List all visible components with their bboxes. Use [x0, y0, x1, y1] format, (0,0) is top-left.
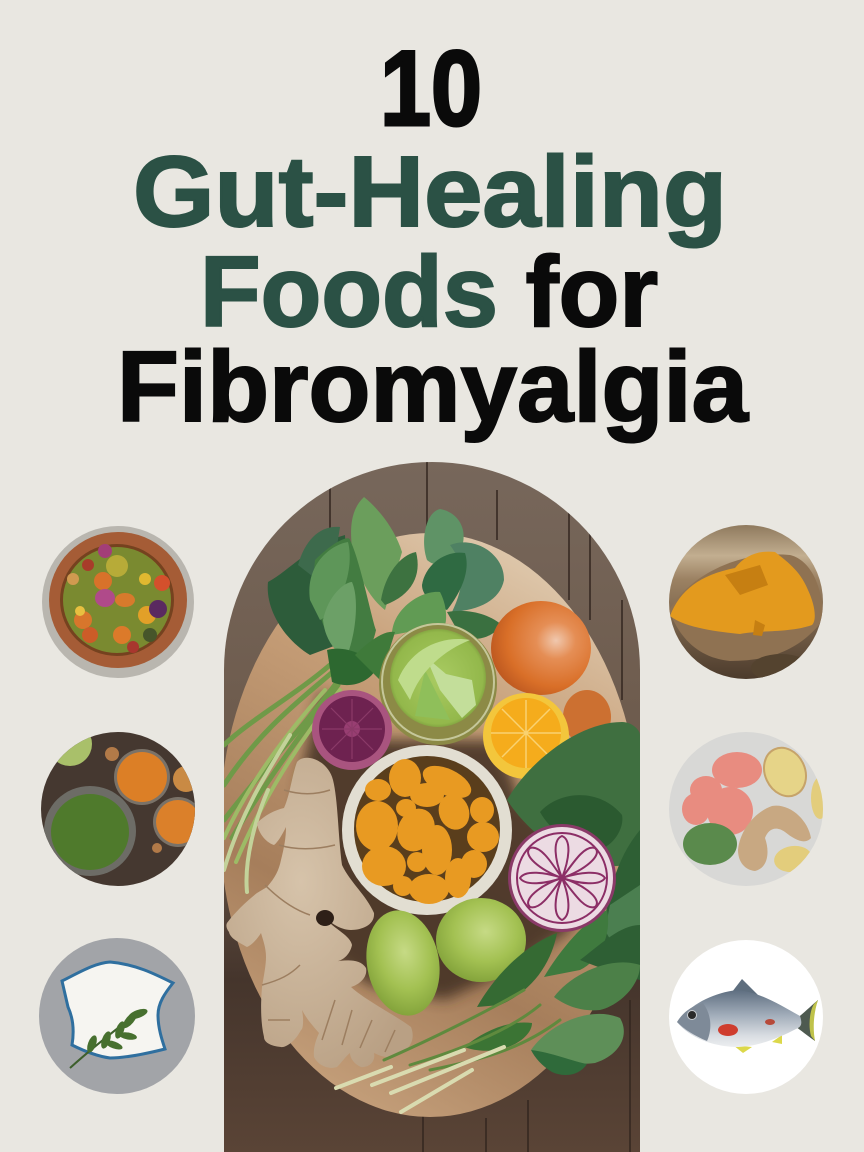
citrus slice — [483, 693, 569, 779]
turmeric heap — [670, 552, 815, 634]
bowl of turmeric chunks — [342, 745, 512, 915]
title line: 10: 10 — [380, 28, 482, 148]
pale backdrop — [669, 732, 823, 886]
small beet slice — [312, 690, 392, 770]
fermented greens jar — [379, 623, 497, 745]
terracotta bowl — [49, 532, 187, 668]
title — [117, 28, 749, 443]
orange bowl right — [153, 797, 195, 847]
fish tail — [795, 1000, 818, 1041]
fish fins — [732, 979, 758, 995]
dark table — [41, 732, 195, 886]
salmon pieces — [682, 752, 762, 835]
central arch photo: food platter — [220, 462, 640, 1152]
food circle: yogurt dish — [39, 938, 195, 1094]
ginger root — [226, 758, 413, 1068]
ginger slices — [756, 741, 814, 803]
title line: Fibromyalgia: Fibromyalgia — [117, 331, 749, 443]
spinach leaves right — [507, 722, 640, 941]
fish eye — [688, 1010, 696, 1020]
title line: Foods for: Foods for — [200, 236, 658, 348]
fish head — [677, 1003, 710, 1041]
food circle: salmon and ginger — [669, 732, 829, 886]
marble backdrop — [39, 938, 195, 1094]
red markings — [718, 1024, 738, 1036]
spinach and scallions bottom right — [336, 910, 640, 1112]
fish body — [677, 990, 801, 1047]
food circle: turmeric powder — [669, 525, 823, 682]
title line: Gut-Healing: Gut-Healing — [133, 136, 727, 248]
ginger root — [738, 806, 811, 871]
lime wedge — [57, 737, 92, 766]
blurred backdrop — [669, 525, 823, 679]
food circle: fish — [669, 940, 823, 1094]
scallion stalks left — [224, 665, 340, 892]
herb garnish — [683, 823, 737, 865]
yogurt dish — [62, 962, 173, 1058]
wooden bowl — [669, 554, 823, 661]
large beet slice — [508, 824, 616, 932]
dark shadow beneath foods — [300, 690, 600, 1000]
small orange — [563, 690, 611, 738]
food circle: green herbs and orange bowls — [41, 732, 195, 886]
stone — [758, 654, 800, 678]
green apples — [358, 898, 526, 1021]
vegetable mix — [63, 547, 171, 653]
spinach leaves top — [268, 497, 504, 685]
small orange bowl — [173, 766, 192, 792]
small nuts — [105, 747, 162, 853]
yellow fins — [733, 1035, 782, 1053]
whole orange — [491, 601, 591, 695]
orange bowl top — [114, 749, 170, 805]
food circle: mixed vegetable bowl — [42, 526, 194, 678]
wooden plate — [220, 533, 640, 1117]
herb bowl — [44, 786, 136, 876]
herb sprig — [70, 1007, 149, 1068]
wooden table — [224, 462, 640, 1152]
wood backdrop — [42, 526, 194, 678]
white backdrop — [669, 940, 823, 1094]
turmeric shadow crumbs — [725, 565, 768, 636]
